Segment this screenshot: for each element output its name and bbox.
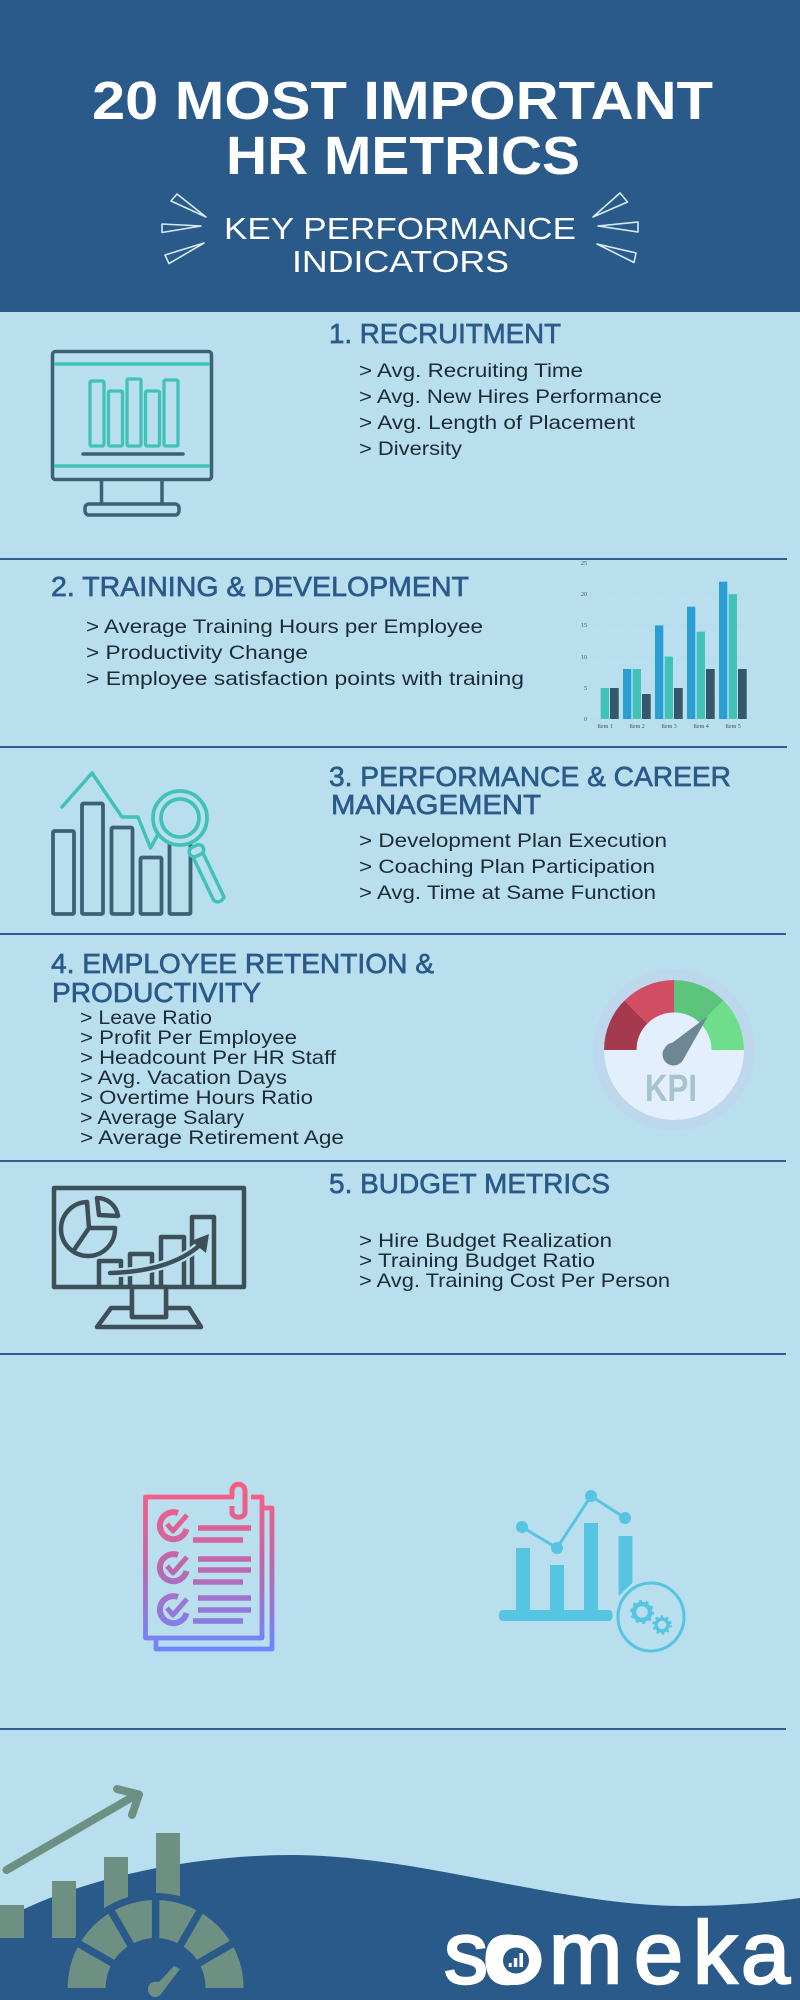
footer wave [0, 1855, 800, 2000]
heading [329, 761, 731, 820]
metrics list: > Average Retirement Age [80, 1127, 344, 1149]
icon: analytics chart with gears [499, 1490, 684, 1651]
metrics list [359, 830, 667, 904]
icon: checklist clipboard [146, 1484, 272, 1649]
subtitle [224, 211, 576, 279]
bar chart [581, 561, 747, 730]
bar chart: Item 3 [661, 724, 677, 730]
metrics list: > Overtime Hours Ratio [80, 1087, 313, 1109]
heading: 4. EMPLOYEE RETENTION & [51, 948, 434, 979]
metrics list: > Avg. Length of Placement [359, 412, 636, 434]
bar chart: 5 [584, 686, 587, 692]
metrics list: > Avg. Time at Same Function [359, 882, 656, 904]
icon: monitor with bars [52, 352, 212, 515]
title [92, 71, 713, 186]
bar chart: 15 [581, 623, 587, 629]
heading: PRODUCTIVITY [52, 977, 261, 1008]
icon: bars with magnifier [53, 773, 224, 914]
metrics list: > Diversity [359, 438, 462, 460]
metrics list [80, 1007, 344, 1149]
bar chart: 0 [584, 717, 587, 723]
icon: rising bars and arrow [0, 1789, 180, 1938]
panel: budget metrics [54, 1168, 670, 1327]
metrics list [359, 1230, 670, 1292]
metrics list: > Headcount Per HR Staff [80, 1047, 337, 1069]
bar chart: Item 4 [693, 724, 709, 730]
title: HR METRICS [226, 126, 580, 186]
bar chart: 20 [581, 592, 587, 598]
metrics list: > Employee satisfaction points with training [86, 668, 524, 690]
icon: speedometer [60, 1893, 251, 2000]
metrics list: > Profit Per Employee [80, 1027, 297, 1049]
metrics list: > Coaching Plan Participation [359, 856, 655, 878]
panel: recruitment [52, 318, 662, 515]
subtitle: INDICATORS [292, 244, 509, 279]
metrics list: > Avg. Training Cost Per Person [359, 1270, 670, 1292]
bar chart: Item 1 [597, 724, 613, 730]
metrics list: > Avg. Recruiting Time [359, 360, 583, 382]
metrics list: > Development Plan Execution [359, 830, 667, 852]
icon: KPI gauge [593, 969, 755, 1131]
metrics list [86, 616, 524, 690]
metrics list: > Avg. Vacation Days [80, 1067, 287, 1089]
panel: employee retention and productivity [51, 948, 755, 1149]
icon: dashboard monitor [54, 1188, 244, 1327]
metrics list: > Hire Budget Realization [359, 1230, 612, 1252]
icon: KPI gauge: KPI [645, 1068, 697, 1110]
subtitle: KEY PERFORMANCE [224, 211, 576, 246]
heading: 2. TRAINING & DEVELOPMENT [51, 571, 469, 602]
title: 20 MOST IMPORTANT [92, 71, 713, 131]
heading [51, 948, 434, 1008]
heading: 1. RECRUITMENT [329, 318, 561, 349]
metrics list [359, 360, 662, 460]
metrics list: > Leave Ratio [80, 1007, 212, 1029]
panel: training and development [51, 561, 747, 730]
header banner [0, 0, 800, 312]
metrics list: > Productivity Change [86, 642, 308, 664]
bar chart: 10 [581, 655, 587, 661]
panel: performance and career management [53, 761, 731, 914]
logo mark inside the letter o [490, 1935, 542, 1985]
heading: MANAGEMENT [331, 789, 541, 820]
bar chart: Item 5 [725, 724, 741, 730]
bar chart: 25 [581, 561, 587, 567]
metrics list: > Average Training Hours per Employee [86, 616, 483, 638]
metrics list: > Training Budget Ratio [359, 1250, 595, 1272]
bar chart: Item 2 [629, 724, 645, 730]
heading: 3. PERFORMANCE & CAREER [329, 761, 731, 792]
heading: 5. BUDGET METRICS [329, 1168, 610, 1199]
metrics list: > Average Salary [80, 1107, 244, 1129]
decorative rays [162, 193, 638, 264]
metrics list: > Avg. New Hires Performance [359, 386, 662, 408]
logo: someka: someka [444, 1903, 790, 2000]
